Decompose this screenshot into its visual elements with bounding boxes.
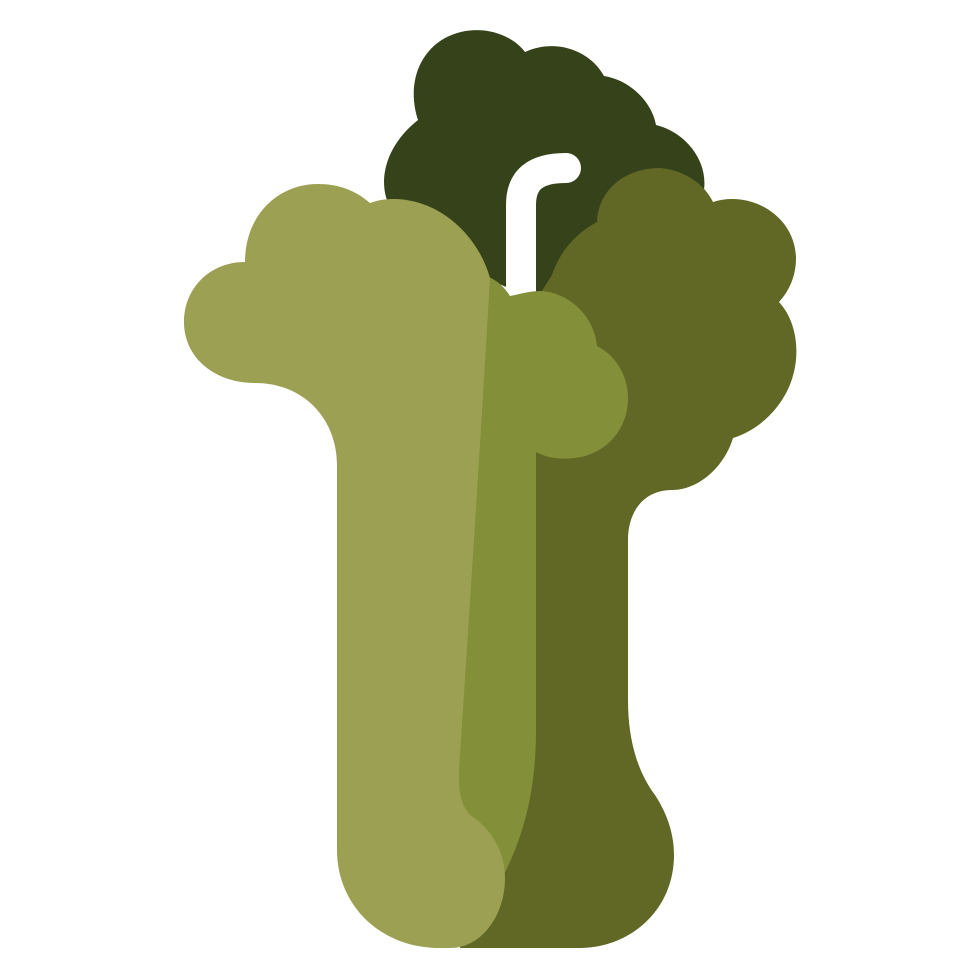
white stem highlight	[521, 168, 566, 300]
right dark-olive leaf and stalk	[460, 168, 796, 948]
middle green leaf and stalk	[440, 276, 628, 900]
back dark leaf	[384, 30, 704, 300]
left light leaf and stalk	[184, 184, 505, 948]
